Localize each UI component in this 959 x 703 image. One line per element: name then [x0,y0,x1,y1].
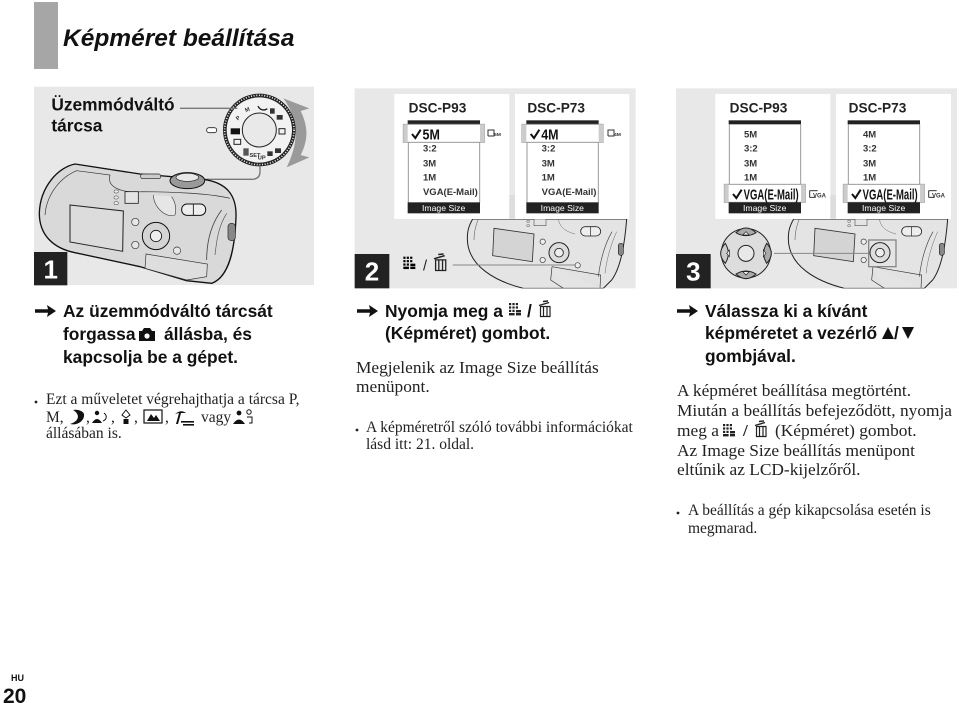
text: step 3 body [677,381,952,479]
menu: DSC-P73: DSC-P73 [527,100,585,115]
menu: DSC-P93: 3:2 [744,144,758,155]
menu: DSC-P73: VGA(E-Mail) [863,187,918,203]
menu: DSC-P93: 5M [423,127,440,143]
text: step 1 instruction: Az üzemmódváltó tárcsát [63,301,273,321]
icon: mode dial: M [244,107,251,114]
icon: scene modes: , [86,409,90,426]
menu: DSC-P93: 5M [744,129,757,140]
title [34,2,294,69]
text: step 3 body: Miután a beállítás befejeződött, nyomja [677,401,952,420]
text: step 1 note: M, [46,409,64,426]
text: step 2 instruction: Nyomja meg a [385,301,503,321]
panel: step 2 menu [355,88,636,288]
icon: scene modes: , [111,409,115,426]
menu: DSC-P93: VGA(E-Mail) [744,187,799,203]
icon: mode dial [223,94,296,166]
menu: DSC-P93: VGA [813,193,827,199]
menu: DSC-P73: Image Size [862,203,905,213]
page number: HU [11,673,24,683]
camera illustration [39,164,236,283]
text: step 3 instruction: képméretet a vezérlő [705,323,877,343]
menu: DSC-P93: DSC-P93 [730,100,788,115]
menu: DSC-P73: 3M [542,158,555,169]
menu: DSC-P93: 3:2 [423,144,437,155]
menu: DSC-P93: 3M [423,158,436,169]
menu: DSC-P73: DSC-P73 [849,100,907,115]
text: step 2 body: menüpont. [356,377,430,396]
menu: DSC-P73: 4M [863,129,876,140]
button label icons [403,254,580,275]
text: step 1 note [35,391,299,442]
text: step 1 note: vagy [201,409,231,426]
menu: DSC-P93 [724,100,827,213]
text: step 2 note: A képméretről szóló további információkat [366,419,634,436]
text: step 3 body: A képméret beállítása megtörtént. [677,381,911,400]
text: step 3 instruction: gombjával. [705,346,796,366]
icon: scene modes: , [134,409,138,426]
text: step 2 instruction: (Képméret) gombot. [385,323,550,343]
text: step 3 note: megmarad. [688,520,757,537]
text: step 2 body: Megjelenik az Image Size beállítás [356,358,599,377]
label: mode dial: Üzemmódváltó [51,95,175,115]
panel: step 3 menu [676,88,957,288]
icon: scene modes: , [165,409,169,426]
step number 1 [34,252,67,285]
text: step 3 body: / [742,421,748,440]
step number 1: 1 [43,255,58,285]
text: step 3 instruction: Válassza ki a kívánt [705,301,868,321]
menu: DSC-P93: Image Size [422,203,465,213]
icon: mode dial: UP [258,155,266,161]
panel: step 1 mode dial and camera: tárcsa [51,116,103,136]
text: step 1 instruction: állásba, és [164,324,252,344]
menu: DSC-P73: 3:2 [542,144,555,155]
text: step 3 body: eltűnik az LCD-kijelzőről. [677,460,860,479]
menu: DSC-P73: 1M [863,173,876,184]
menu: DSC-P73: 4M [541,127,559,143]
text: step 3 body: meg a [677,421,719,440]
step number 3 [676,254,711,288]
menu: DSC-P73: VGA [932,193,946,199]
text: step 1 instruction [35,301,273,367]
menu: DSC-P93 [403,100,501,213]
text: step 2 note [356,419,634,453]
icon: mode dial: SET [249,153,261,159]
text: step 2 instruction: / [527,301,532,321]
menu: DSC-P93: Image Size [743,203,786,213]
text: step 2 instruction [357,301,550,343]
text: step 3 body: (Képméret) gombot. [775,421,917,440]
menu: DSC-P73 [843,100,946,213]
icon: scene modes [70,409,194,426]
menu: DSC-P93: 3M [744,158,757,169]
step number 2: 2 [365,257,379,287]
icon: mode dial: P [235,115,242,122]
text: step 3 body: Az Image Size beállítás menüpont [677,441,915,460]
text: step 2 body [356,358,599,396]
title: Képméret beállítása [63,25,294,52]
text: step 3 instruction [677,301,914,366]
step number 3: 3 [686,257,701,287]
menu: DSC-P73: VGA(E-Mail) [542,187,596,198]
menu: DSC-P73: Image Size [541,203,584,213]
menu: DSC-P93: 1M [423,173,436,184]
page number [3,673,26,703]
menu: DSC-P73: 3:2 [863,144,877,155]
menu: DSC-P73: 4M [614,132,621,138]
text: step 3 note: A beállítás a gép kikapcsolása esetén is [688,502,931,519]
text: step 2 note: lásd itt: 21. oldal. [366,436,474,453]
panel: step 1 mode dial and camera [34,87,314,285]
menu: DSC-P93: VGA(E-Mail) [423,187,478,198]
icon: control pad [721,228,896,279]
text: step 1 instruction: forgassa [63,324,136,344]
text: step 1 note: állásában is. [46,425,122,442]
menu: DSC-P93: DSC-P93 [409,100,467,115]
menu: DSC-P73 [522,100,621,213]
menu: DSC-P73: 3M [863,158,876,169]
menu: DSC-P93: 1M [744,173,757,184]
text: step 3 instruction: / [894,323,899,343]
icon: rotation arrows [283,98,309,167]
menu: DSC-P73: 1M [542,173,555,184]
menu: DSC-P93: 5M [494,132,501,138]
text: step 3 note [677,502,931,537]
text: step 1 note: Ezt a műveletet végrehajthatja a tárcsa P, [46,391,299,408]
button label icons: / [423,259,428,275]
step number 2 [355,254,389,288]
text: step 1 instruction: kapcsolja be a gépet. [63,347,238,367]
